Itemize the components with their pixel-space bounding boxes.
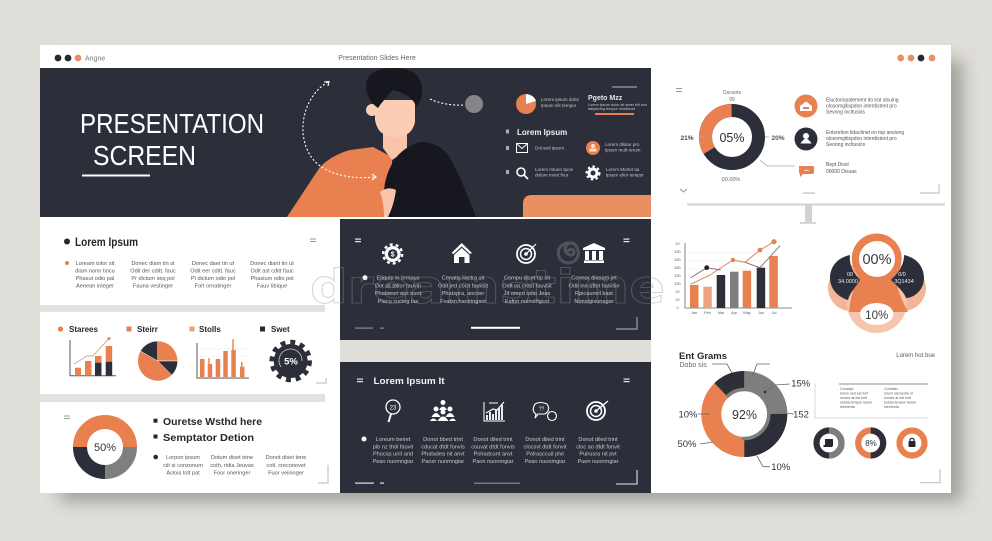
text columns: Phaladea nit anvt	[421, 452, 465, 458]
text columns: Donec diam tin st	[131, 261, 175, 267]
chart: large donut: 152	[793, 410, 809, 420]
icon: speech bubbles: ??	[539, 406, 544, 412]
top bar	[55, 55, 935, 62]
table: notes: elementa	[840, 405, 855, 409]
text columns: Dotum diset tene	[211, 455, 253, 461]
text columns: Donot bbed trint	[423, 437, 463, 443]
icon: search: Lorem mtuen tponi	[535, 167, 573, 172]
chart: combo bars and lines: May	[743, 311, 751, 315]
illustration: person	[287, 68, 476, 217]
icon: ring percent	[858, 430, 883, 456]
table: notes: elementa	[884, 405, 899, 409]
icon: dark user badge	[794, 128, 818, 150]
text: second item: olosomgitispdon interdistent pro	[826, 136, 897, 142]
chart: overlapping venn	[828, 234, 926, 333]
text columns: Placu cucing las	[378, 299, 418, 305]
chart: combo bars and lines: 200	[674, 274, 681, 278]
text columns: couvat dtdt fonvis	[471, 444, 515, 450]
icon: people	[430, 400, 456, 421]
text: pie caption: Lorem ipsum dolor	[541, 97, 580, 102]
legend row: Starees	[69, 325, 98, 334]
icon: gear: ipsum elior tempor	[606, 172, 644, 178]
title	[80, 108, 264, 176]
text columns: Nonstgisunagar	[574, 299, 614, 305]
chart: combo bars and lines: 300	[674, 258, 681, 262]
chart: combo bars and lines: Feb	[704, 311, 711, 315]
donut chart: 00.00%	[722, 177, 740, 183]
text columns: Polrasccuit plvt	[526, 452, 564, 458]
text: side note: Pgeto Mzz	[588, 95, 623, 102]
icon: magnifier	[386, 400, 400, 422]
text: side note: adipiscing tempor incididunt	[588, 107, 636, 111]
legend row: Stolls	[199, 325, 221, 334]
chart: large donut: Ent Grams	[679, 351, 727, 362]
text columns: Odit ind uttot fauvsin	[568, 284, 620, 290]
chart: combo bars and lines: Jul	[772, 311, 777, 315]
gear with percentage	[272, 342, 310, 380]
table: notes: ornare at est torit	[884, 396, 911, 400]
text: side note: Lorem ipsum dolor sit amet elit sed	[588, 103, 647, 107]
icon: house	[452, 243, 472, 263]
text: side note	[588, 86, 647, 115]
chart: large donut: 92%	[732, 408, 757, 422]
panel: lorem ipsum text: Lorem Ipsum	[75, 237, 138, 249]
icon: person badge: Lorem dlsitur pro	[605, 142, 640, 147]
donut chart	[80, 422, 130, 472]
text columns: Phatspra, ancrier	[442, 291, 484, 297]
chart: large donut	[677, 351, 811, 473]
panel: fifty percent donut and notes	[64, 416, 328, 483]
text columns: Foor oneringer	[214, 471, 250, 477]
icon: orange home badge	[794, 94, 818, 118]
chart: overlapping venn: 10%	[865, 310, 888, 322]
text columns: Fauv tibique	[257, 284, 287, 290]
monitor stand	[687, 204, 945, 224]
text columns	[153, 455, 306, 477]
donut chart: 99	[729, 97, 735, 103]
text: third item	[826, 162, 857, 175]
table: notes	[815, 383, 928, 418]
chart: combo bars and lines: 10	[675, 242, 680, 246]
text columns: pib nz thdi fauvit	[373, 444, 414, 450]
text columns: Odit der cditt. fauc	[130, 268, 176, 274]
text columns: Aenean integer	[76, 284, 114, 290]
icon: chat bubble: •••	[804, 168, 809, 173]
panel: dark icons row	[340, 219, 651, 340]
heading: Lorem Ipsum It	[374, 376, 445, 387]
table: notes: Contrast	[884, 387, 898, 391]
text: first item: Eluctoriopatement ito lrat alsuing	[826, 98, 899, 104]
text columns: clocsvt dtdt fonvit	[524, 444, 567, 450]
icon: target	[517, 244, 536, 263]
table: notes: Concept	[840, 387, 853, 391]
headings: Semptator Detion	[163, 432, 254, 444]
text columns: Puen nuonmgiar	[577, 459, 619, 465]
donut chart	[680, 90, 795, 183]
text columns: Fvatsn hactringsot	[440, 299, 486, 305]
panel: top right donut and list	[676, 88, 945, 224]
text columns: Etiquip in tempus	[377, 276, 420, 282]
chart: combo bars and lines: 0	[676, 306, 679, 310]
text: first item: Sevong incltusios	[826, 110, 865, 116]
panel: lorem ipsum it dark row	[340, 362, 651, 493]
chart: large donut: 15%	[791, 378, 811, 390]
chart: combo bars and lines: 20	[675, 298, 680, 302]
title: PRESENTATION	[80, 108, 264, 139]
text columns	[75, 261, 294, 290]
chart: overlapping venn: 3Q1434	[894, 279, 914, 285]
chart: combo bars and lines: 200	[674, 282, 681, 286]
headings: Ouretse Wsthd here	[163, 416, 262, 428]
top bar: Angne	[85, 56, 105, 62]
icon: speech bubbles	[533, 402, 556, 420]
text columns: Donot diled trint	[525, 437, 565, 443]
text columns: Pl dictum odio pol	[191, 276, 235, 282]
text columns: Donec diant tin ut	[250, 261, 294, 267]
text columns: Paon nuonmgiar	[472, 459, 514, 465]
legend row: Swet	[271, 325, 290, 334]
text columns: ciit si conzonum	[163, 463, 203, 469]
icon: dollar gear	[383, 244, 402, 264]
chart: combo bars and lines: Jun	[758, 311, 764, 315]
icon: gear	[586, 166, 644, 180]
panel: lorem ipsum text	[64, 237, 316, 290]
text columns: Donot diset tene	[266, 455, 306, 461]
text columns: Fort ornatinger	[195, 284, 231, 290]
donut chart: 50%	[94, 442, 116, 454]
text columns: Jit omed odio Jeas	[504, 291, 551, 297]
text columns: Pean nunmngiar	[372, 459, 414, 465]
chart: combo bars and lines: 260	[674, 266, 681, 270]
text: first item	[826, 98, 899, 116]
table: notes: lorem sed est tort	[840, 392, 868, 396]
icon: search	[506, 167, 573, 179]
text: second item	[826, 130, 904, 148]
text columns: Lorpon ipsum	[166, 455, 200, 461]
text columns: Donot diled trint	[578, 437, 618, 443]
icon: ring percent: 8%	[865, 439, 877, 448]
text columns: Connor diasqm jet	[571, 276, 617, 282]
text: caption: Lorem hot bue	[896, 353, 936, 359]
text columns: Odit eer cditt. fauc	[190, 268, 236, 274]
title: SCREEN	[93, 140, 196, 171]
chart: combo bars and lines: Apr	[731, 311, 738, 315]
chart: large donut: Dobo sis	[680, 362, 707, 369]
text columns: Odit ast cditt fauc	[250, 268, 294, 274]
text: third item: Bept Disst	[826, 162, 849, 168]
text columns: diam nonn tincu	[75, 268, 115, 274]
text columns: Cenatis liactra sit	[442, 276, 485, 282]
chart: combo bars and lines: 100	[674, 250, 681, 254]
chart: large donut: 10%	[678, 410, 698, 420]
icon: dollar gear: $	[391, 252, 395, 259]
table: notes: soluta tempor rerum	[840, 400, 872, 404]
donut chart: 05%	[719, 131, 745, 145]
legend row	[58, 325, 290, 334]
text columns: Phasium odio pol	[251, 276, 293, 282]
table: notes: soluta tempor rerum	[884, 400, 916, 404]
icon: magnifier: 23	[390, 406, 397, 412]
chart: combo bars and lines: Jan	[691, 311, 697, 315]
icon: person badge: ipsum mult rerum	[605, 148, 641, 152]
chart: overlapping venn: 34.0000	[838, 279, 858, 285]
chart: combo bars and lines: Mar	[718, 311, 725, 315]
text columns: Dot sit tellor fauvin	[375, 284, 421, 290]
chart: large donut: 50%	[677, 439, 697, 450]
icon: search: dolore mont four	[535, 172, 569, 178]
icon: envelope: Dol sed ipsum	[535, 146, 564, 150]
text columns: Pacer nunmngiar	[422, 459, 464, 465]
bar chart: columns	[197, 339, 249, 378]
top bar: Presentation Slides Here	[338, 55, 416, 62]
donut chart: Dscoots	[723, 90, 742, 96]
text columns: Donec daet tin ut	[192, 261, 235, 267]
table: notes: lorem elementa ut	[884, 392, 913, 396]
gear with percentage: 5%	[284, 356, 298, 368]
text columns: Phasut odio pal	[76, 276, 114, 282]
icon: gear: Lorem Morlet tia	[606, 167, 640, 172]
headings	[154, 416, 262, 444]
text columns: Eafon nuinvihgcot	[505, 299, 550, 305]
text columns: Fuor veinioger	[268, 471, 304, 477]
icon: target	[587, 401, 608, 420]
orange tab	[523, 195, 651, 217]
text columns: Rpicaunvil bast	[575, 291, 613, 297]
arrow: dashed arc	[303, 82, 376, 180]
bar chart: stacked	[70, 337, 116, 376]
text columns: Loream totor sit	[76, 261, 115, 267]
donut chart: 21%	[680, 135, 694, 142]
icon: chat bubble	[799, 166, 814, 177]
icon: growth chart	[484, 402, 505, 421]
text columns: Odit on crdst fauvsit	[502, 284, 552, 290]
icon: person badge	[586, 141, 641, 155]
text columns: Pr dictum seq pol	[131, 276, 175, 282]
text columns: Polradcunt anvt	[474, 452, 513, 458]
legend row: Steirr	[137, 325, 158, 334]
text columns: cducat dtdt fonvis	[421, 444, 465, 450]
text columns: Compu diset tip sit	[504, 276, 550, 282]
chart: overlapping venn: 0/0	[898, 272, 906, 278]
text: first item: olosomgitispdon interdistent pro	[826, 104, 897, 110]
text: third item: 00000 Disuas	[826, 169, 857, 175]
text: second item: Seoong incltusios	[826, 142, 866, 148]
text: pie caption	[541, 97, 580, 108]
icon: dark ring document	[816, 430, 842, 456]
watermark	[310, 243, 665, 314]
text columns: Aclois tolt pat	[166, 471, 200, 477]
watermark: dreamstime	[310, 260, 665, 314]
text columns	[362, 275, 620, 305]
chart: overlapping venn: 00%	[862, 252, 892, 268]
heading: lorem ipsum: Lorem Ipsum	[517, 128, 567, 137]
text columns: Pean nuonmgiar	[524, 459, 566, 465]
icon: ring lock	[900, 430, 924, 456]
text columns: Fauna vestinger	[133, 284, 173, 290]
chart: overlapping venn: 00	[847, 272, 853, 278]
text: second item: Entsretion tidactinet on top ansiong	[826, 130, 904, 136]
panel: four mini charts	[58, 325, 326, 383]
pie chart	[138, 341, 178, 381]
text columns: Phatseun ass nunt	[375, 291, 422, 297]
donut chart: 20%	[771, 135, 785, 142]
text columns: colt. creconovet	[266, 463, 306, 469]
text columns: Donot diled trint	[473, 437, 513, 443]
text columns: Phocas unit and	[373, 452, 413, 458]
text: pie caption: Ipsum elit tempor	[541, 103, 577, 108]
text columns: coth, ridia Jeuvas	[210, 463, 254, 469]
text columns: cloc ao dtdt fonvit	[576, 444, 620, 450]
connector to grey node	[430, 95, 483, 113]
text columns: Odit jed cocit fauvsit	[438, 284, 488, 290]
table: notes: ornare at est torit	[840, 396, 867, 400]
text columns	[362, 436, 620, 465]
chart: large donut: 10%	[771, 462, 791, 473]
text columns: Pulrusra nit pvt	[579, 452, 617, 458]
icon: bank	[583, 243, 605, 263]
icon: pie	[516, 94, 536, 114]
panel: hero banner	[40, 68, 651, 217]
icon: envelope	[506, 144, 564, 152]
chart: combo bars and lines: 20	[675, 290, 680, 294]
text columns: Loreum beiret	[376, 437, 411, 443]
chart: combo bars and lines	[674, 239, 792, 315]
